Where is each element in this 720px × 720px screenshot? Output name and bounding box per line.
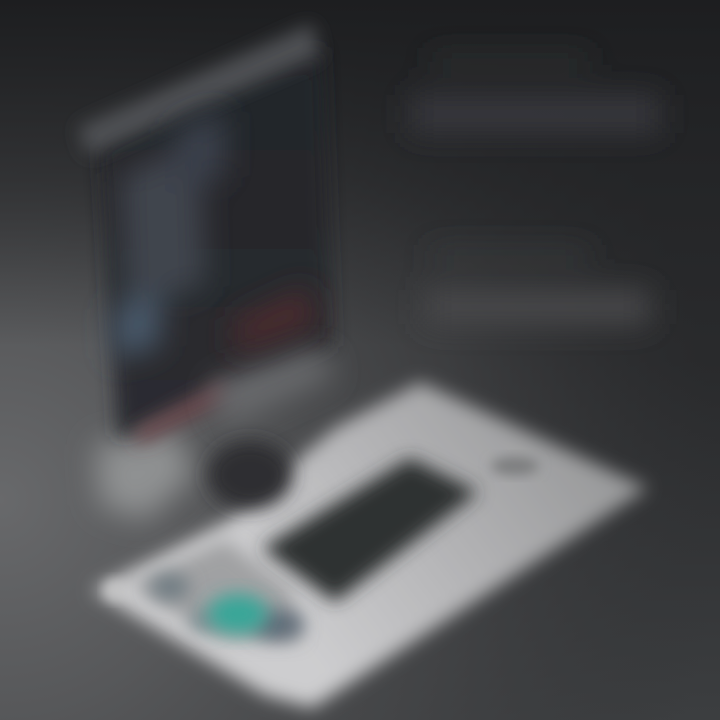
monitor (78, 24, 335, 520)
dark trackpad (262, 458, 478, 602)
tablet slab (92, 382, 648, 708)
screen chart: red columns (135, 285, 315, 445)
monitor lower chin (210, 350, 335, 425)
tablet left wing tint (130, 540, 300, 640)
left bright spot (105, 580, 125, 600)
small control at top right (491, 457, 539, 475)
teal icon (208, 594, 268, 634)
screen chart: blue columns (112, 110, 225, 360)
shadow between monitor and tablet (208, 441, 292, 509)
monitor screen (100, 45, 332, 438)
text block: upper caption placeholder (410, 55, 660, 133)
tablet (92, 382, 648, 708)
app icons row (150, 574, 304, 640)
monitor top bezel (78, 24, 320, 155)
text block: lower caption placeholder (425, 250, 650, 324)
monitor stand (95, 430, 195, 520)
